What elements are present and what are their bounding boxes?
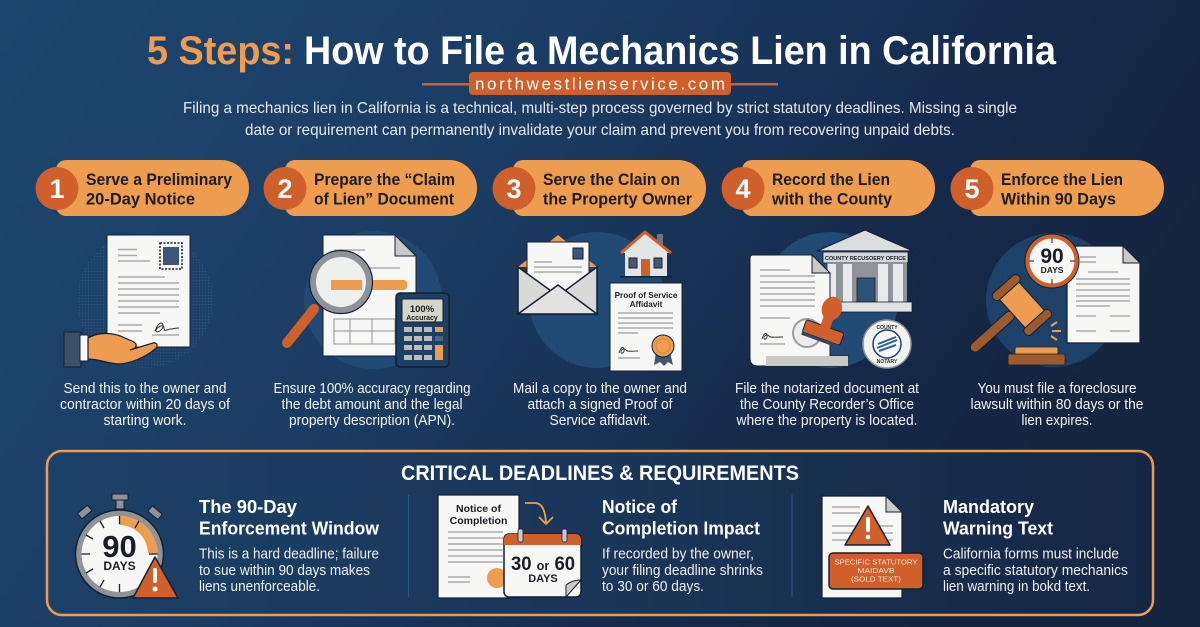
item: 90-day window: The 90-Day	[199, 497, 297, 517]
step 5 header: Enforce the Lien	[1001, 170, 1123, 189]
step 3 header	[492, 160, 706, 216]
step 4 header	[722, 160, 935, 216]
step 1 header: 1	[49, 174, 65, 204]
item: notice of completion: If recorded by the owner,	[602, 546, 754, 562]
step 1 description: contractor within 20 days of	[60, 396, 231, 413]
step 3 description	[513, 380, 687, 429]
website badge	[422, 72, 778, 95]
icon: stopwatch with warning: 90	[102, 529, 137, 564]
step 3 description: attach a signed Proof of	[528, 396, 673, 413]
step 2 description: Ensure 100% accuracy regarding	[274, 380, 470, 397]
icon: warning document: SPECIFIC STATUTORY	[834, 560, 918, 566]
step 3 description: Service affidavit.	[550, 412, 650, 429]
step 5 header: Within 90 Days	[1001, 190, 1116, 208]
item: 90-day window: to sue within 90 days makes	[199, 562, 370, 579]
icon: stopwatch with warning	[76, 494, 178, 598]
step 1 header	[36, 160, 249, 216]
title: 5 Steps:	[147, 29, 294, 73]
icon: gavel, clock and document	[953, 233, 1140, 371]
icon: notice and calendar: DAYS	[528, 573, 558, 585]
item: 90-day window: This is a hard deadline; failure	[199, 546, 379, 562]
intro text: Filing a mechanics lien in California is a technical, multi-step process governed by strict statutory deadlines. Missing a single	[183, 100, 1017, 117]
icon: envelope, house and affidavit: Proof of Service	[615, 291, 678, 300]
item: notice of completion: Notice of	[602, 497, 678, 517]
step 1 description	[60, 380, 231, 429]
icon: notice and calendar: Completion	[450, 515, 507, 527]
step 3 header: the Property Owner	[543, 190, 692, 208]
icon: envelope, house and affidavit: Affidavit	[630, 300, 663, 309]
icon: county recorder building and stamp: COUNTY RECUSOERY OFFICE	[825, 256, 906, 262]
step 5 header	[950, 160, 1164, 216]
step 3 header: 3	[506, 174, 522, 204]
icon: gavel, clock and document: 90	[1040, 245, 1064, 268]
step 4 header: 4	[735, 174, 751, 204]
step 3 description: Mail a copy to the owner and	[513, 380, 687, 397]
step 4 header: Record the Lien	[772, 170, 890, 189]
icon: warning document: (SOLD TEXT)	[851, 576, 901, 584]
step 5 description: lawsult within 80 days or the	[970, 396, 1144, 413]
icon: envelope, house and affidavit	[518, 232, 682, 371]
intro text: date or requirement can permanently invalidate your claim and prevent you from recovering unpaid debts.	[245, 122, 955, 139]
step 5 description: You must file a foreclosure	[978, 380, 1136, 397]
item: notice of completion: to 30 or 60 days.	[602, 578, 704, 595]
icon: magnifier and calculator: 100%	[410, 304, 435, 315]
item: mandatory warning text: Mandatory	[943, 497, 1034, 517]
step 4 description: where the property is located.	[736, 412, 918, 429]
step 4 header: with the County	[771, 190, 893, 208]
step 2 description: property description (APN).	[289, 412, 455, 429]
title: How to File a Mechanics Lien in California	[304, 29, 1057, 73]
item: notice of completion: your filing deadline shrinks	[602, 562, 763, 579]
step 3 header: Serve the Clain on	[543, 170, 680, 189]
step 2 header	[264, 160, 477, 216]
website badge: northwestlienservice.com	[475, 74, 725, 94]
step 4 description: File the notarized document at	[735, 380, 920, 397]
step 1 header: Serve a Preliminary	[86, 170, 232, 189]
step 2 description: the debt amount and the legal	[282, 396, 462, 413]
icon: county recorder building and stamp: COUNTY	[876, 325, 898, 331]
item: mandatory warning text: lien warning in bokd text.	[943, 578, 1090, 595]
icon: warning document: MAIDAVB	[858, 568, 895, 575]
item: mandatory warning text: California forms must include	[943, 546, 1119, 562]
item: 90-day window	[199, 497, 380, 595]
step 2 description	[274, 380, 470, 429]
item: notice of completion: Completion Impact	[602, 518, 760, 538]
step 5 description	[970, 380, 1144, 429]
step 2 header: 2	[277, 174, 293, 204]
item: mandatory warning text	[943, 497, 1128, 595]
icon: stopwatch with warning: DAYS	[103, 559, 136, 573]
icon: county recorder building and stamp	[750, 230, 913, 368]
step 4 description	[735, 380, 920, 429]
icon: county recorder building and stamp: NOTARY	[877, 359, 898, 365]
panel: critical deadlines	[47, 451, 1153, 615]
step 5 description: lien expires.	[1022, 412, 1092, 429]
item: mandatory warning text: a specific statutory mechanics	[943, 562, 1128, 579]
step 1 description: Send this to the owner and	[64, 380, 226, 397]
step 2 header: Prepare the “Claim	[314, 170, 455, 189]
icon: notice and calendar: 30 or 60	[511, 554, 575, 575]
item: mandatory warning text: Warning Text	[943, 518, 1053, 538]
icon: gavel, clock and document: DAYS	[1041, 265, 1064, 275]
step 1 description: starting work.	[104, 412, 186, 429]
panel heading: CRITICAL DEADLINES & REQUIREMENTS	[401, 462, 799, 485]
step 1 header: 20-Day Notice	[86, 190, 195, 208]
icon: notice and calendar: Notice of	[456, 503, 501, 515]
step 5 header: 5	[964, 174, 980, 204]
icon: magnifier and calculator: Accuracy	[406, 315, 438, 322]
icon: document handed over	[64, 232, 213, 368]
item: notice of completion	[602, 497, 763, 595]
step 2 header: of Lien” Document	[314, 190, 454, 208]
step 4 description: the County Recorder’s Office	[740, 396, 914, 413]
icon: warning document	[822, 496, 923, 598]
icon: magnifier and calculator	[287, 231, 449, 369]
intro text	[183, 100, 1017, 139]
icon: notice and calendar	[438, 495, 581, 598]
item: 90-day window: Enforcement Window	[199, 518, 380, 538]
item: 90-day window: liens unenforceable.	[199, 578, 320, 595]
